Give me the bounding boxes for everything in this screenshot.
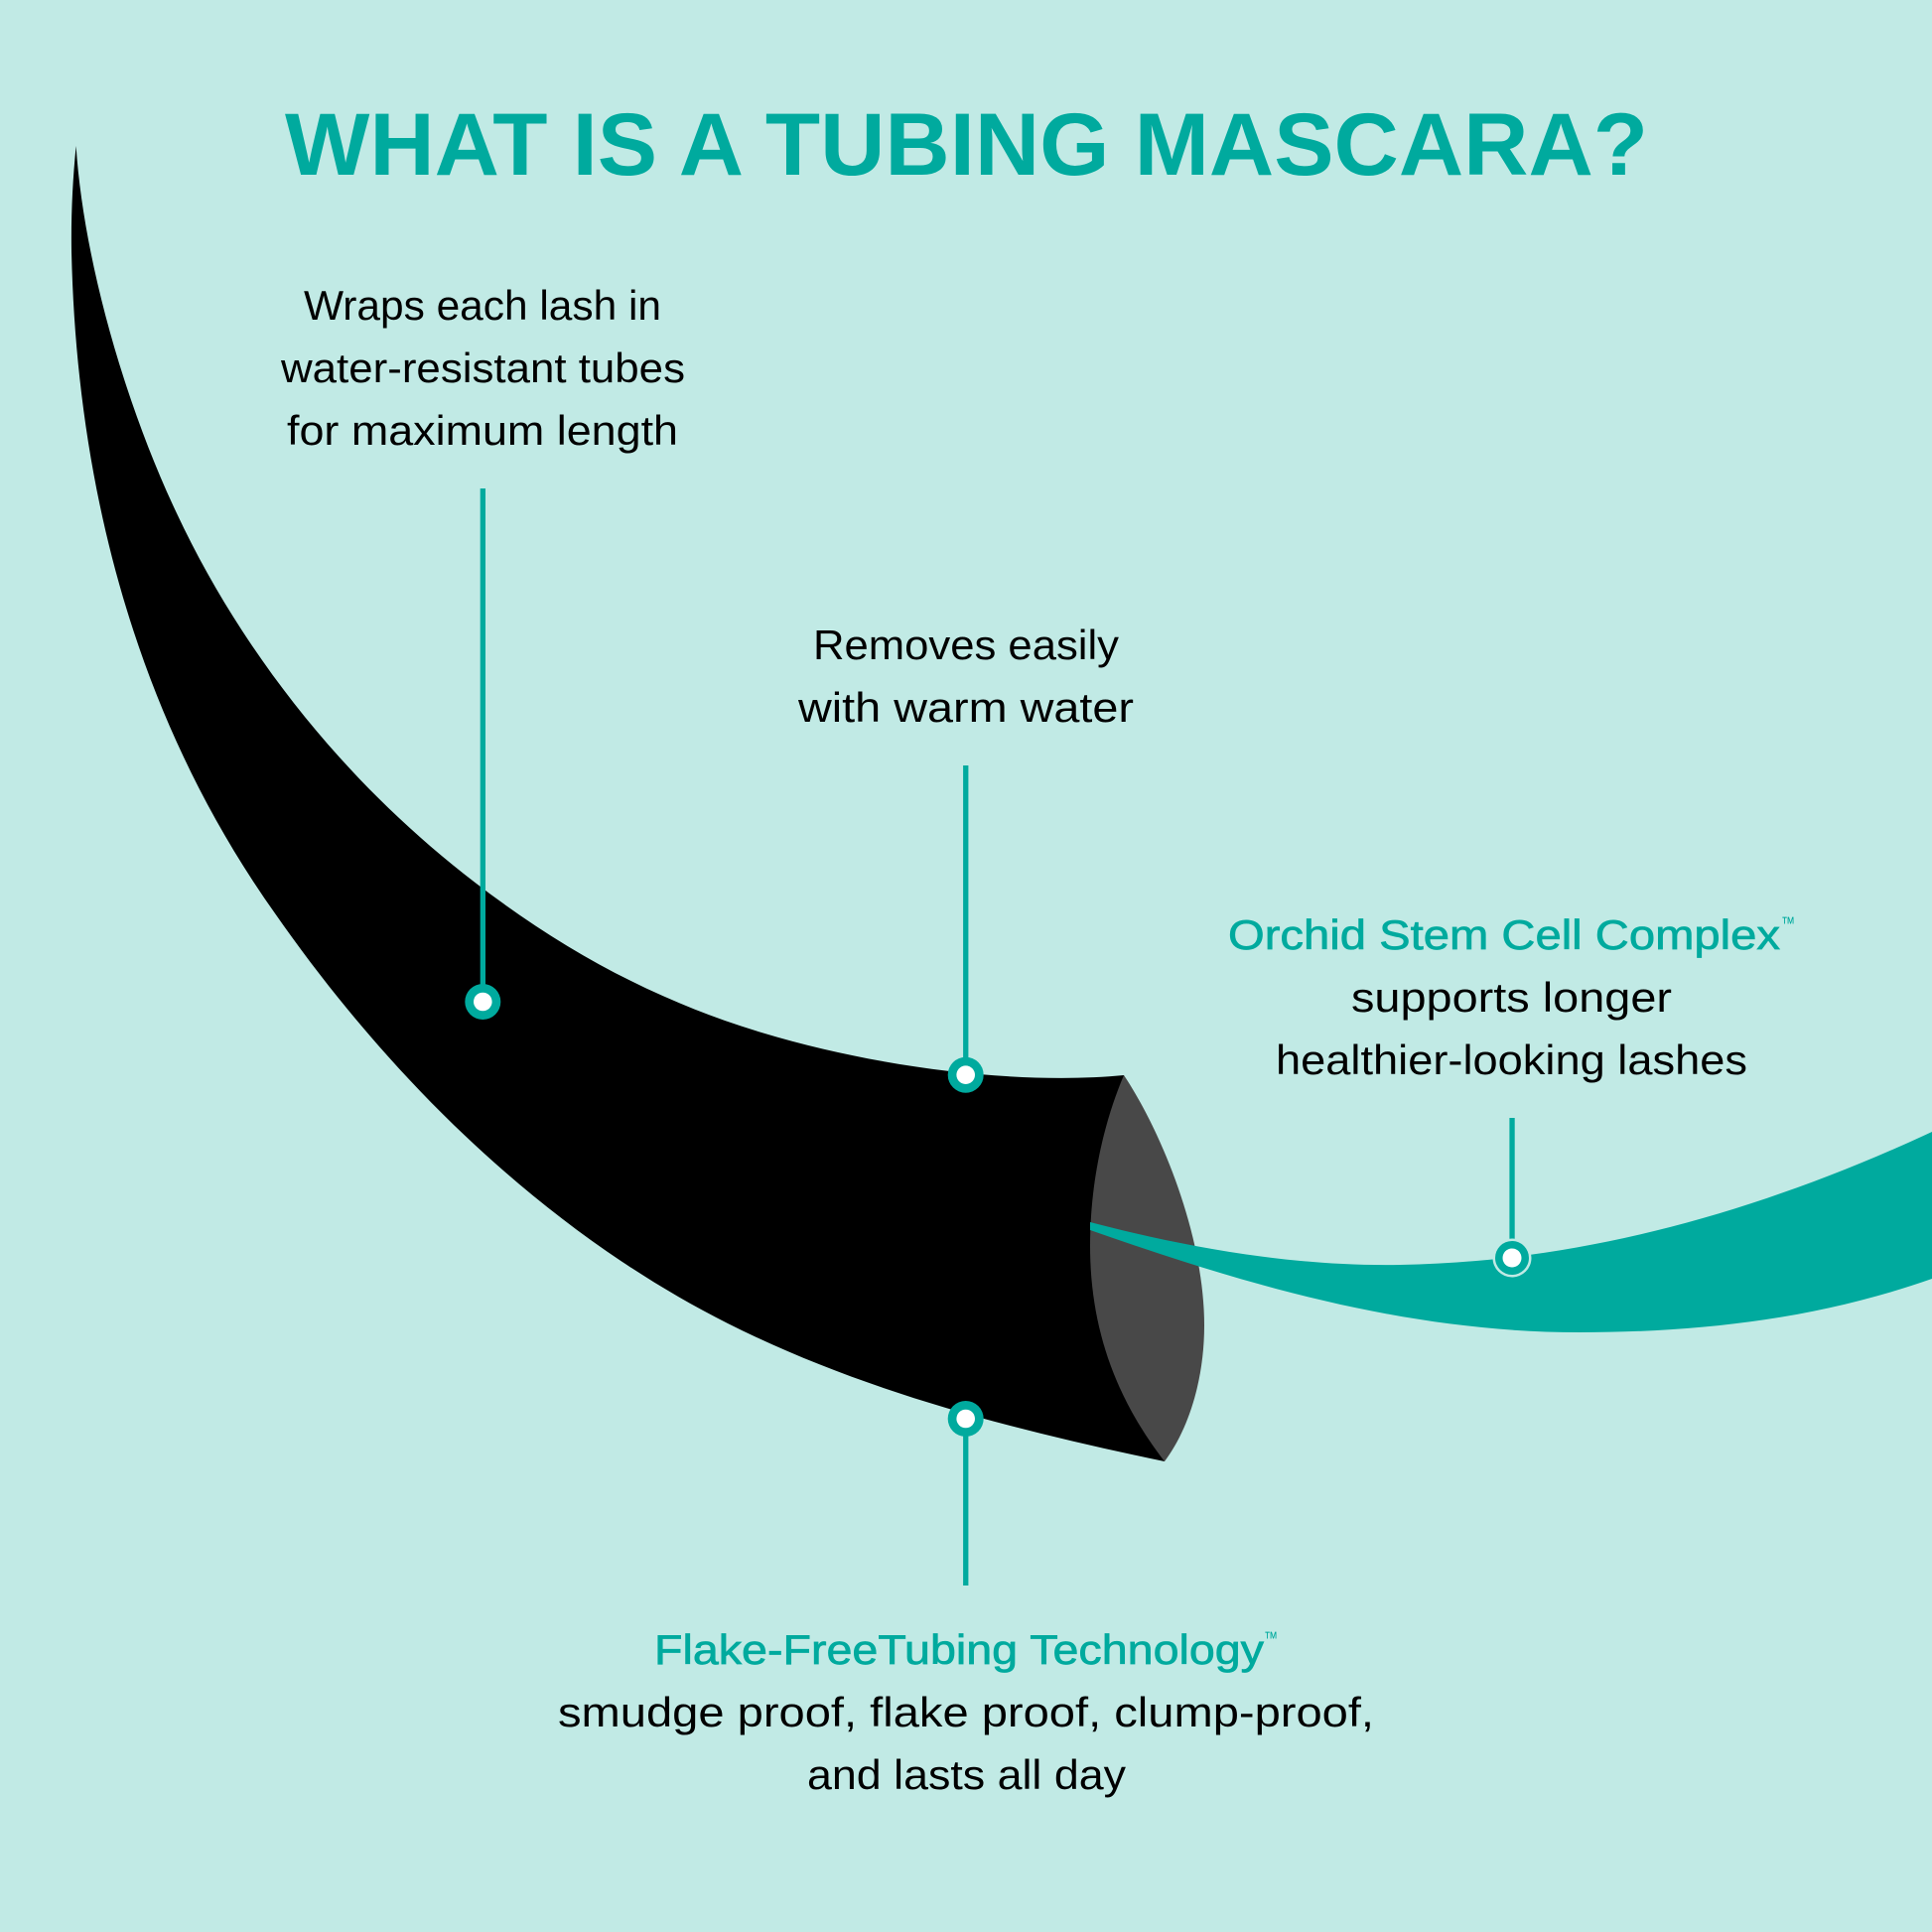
callout text: supports longer	[1351, 974, 1672, 1021]
callout text: ™	[1781, 913, 1795, 933]
callout text	[280, 282, 685, 454]
callout text: ™	[1264, 1628, 1278, 1648]
callout: flake-free tubing technology	[558, 1401, 1374, 1798]
callout: removes easily	[797, 621, 1134, 1093]
black lash tube	[71, 146, 1165, 1461]
callout: wraps each lash	[280, 282, 685, 1020]
callout text: and lasts all day	[807, 1751, 1126, 1798]
leader line	[963, 765, 968, 1074]
marker dot	[465, 984, 500, 1020]
callout text	[558, 1626, 1374, 1798]
callout text: healthier-looking lashes	[1276, 1036, 1747, 1083]
marker dot	[1493, 1239, 1531, 1277]
callout text: Wraps each lash in	[304, 282, 661, 329]
callout text: with warm water	[797, 684, 1134, 731]
teal natural lash	[1090, 1132, 1932, 1332]
leader line	[1509, 1118, 1515, 1258]
leader line	[963, 1419, 968, 1586]
callout text: Removes easily	[813, 621, 1119, 668]
callout text: smudge proof, flake proof, clump-proof,	[558, 1689, 1374, 1735]
callout text	[1228, 911, 1795, 1083]
grey lash end cap	[1090, 1075, 1204, 1461]
illustration: lash tube cross-section	[71, 146, 1932, 1461]
callout text: Flake-FreeTubing Technology	[654, 1626, 1264, 1673]
callout text: water-resistant tubes	[280, 345, 685, 391]
title: WHAT IS A TUBING MASCARA?	[285, 94, 1648, 194]
marker dot	[948, 1401, 984, 1437]
callout text: for maximum length	[287, 407, 678, 454]
marker dot	[948, 1057, 984, 1093]
callout: orchid stem cell complex	[1228, 911, 1795, 1277]
leader line	[481, 488, 485, 1002]
callout text: Orchid Stem Cell Complex	[1228, 911, 1780, 958]
callout text	[797, 621, 1134, 731]
